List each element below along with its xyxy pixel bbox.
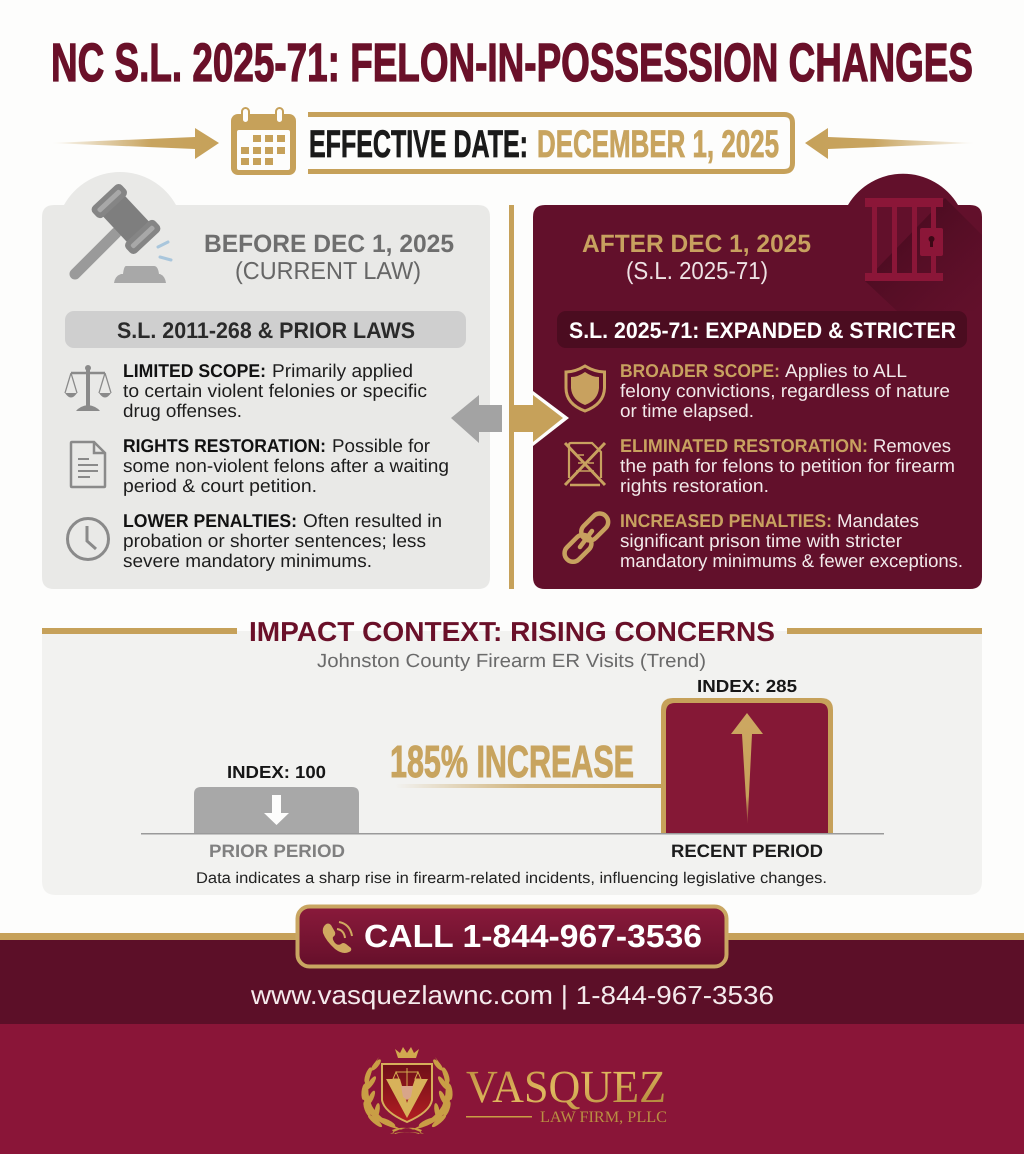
broader scope text: felony convictions, regardless of nature bbox=[620, 380, 950, 401]
impact rule left bbox=[42, 628, 237, 634]
after subheading: (S.L. 2025-71) bbox=[626, 258, 768, 285]
rights restoration text bbox=[123, 435, 449, 496]
eliminated restoration text: ELIMINATED RESTORATION: bbox=[620, 435, 868, 456]
rights restoration text: RIGHTS RESTORATION: bbox=[123, 435, 326, 456]
arrow: grey pointing left bbox=[451, 395, 502, 443]
after heading: AFTER DEC 1, 2025 bbox=[582, 230, 811, 258]
limited scope text: to certain violent felonies or specific bbox=[123, 380, 427, 401]
rights restoration text: Possible for bbox=[332, 435, 430, 456]
lower penalties text: severe mandatory minimums. bbox=[123, 550, 372, 571]
broader scope text: BROADER SCOPE: bbox=[620, 360, 780, 381]
before law pill bbox=[65, 311, 466, 348]
panel background bbox=[42, 172, 490, 589]
date box outline bbox=[308, 114, 792, 172]
limited scope text: LIMITED SCOPE: bbox=[123, 360, 266, 381]
call button: CALL 1-844-967-3536 bbox=[364, 918, 702, 954]
effective date banner bbox=[50, 108, 976, 175]
bar: recent period bbox=[661, 676, 833, 834]
eliminated restoration text: Removes bbox=[873, 435, 951, 456]
icon: gavel bbox=[75, 182, 171, 283]
shield bbox=[382, 1064, 432, 1122]
after law pill bbox=[557, 311, 967, 348]
increased penalties text: significant prison time with stricter bbox=[620, 530, 902, 551]
arrow: gold pointing right bbox=[510, 391, 569, 446]
logo rule bbox=[466, 1116, 532, 1118]
logo crest bbox=[361, 1047, 453, 1134]
arrow: left pointing in bbox=[50, 128, 219, 159]
rights restoration text: period & court petition. bbox=[123, 475, 317, 496]
limited scope text: drug offenses. bbox=[123, 400, 242, 421]
shield V bbox=[386, 1079, 428, 1118]
eliminated restoration text: rights restoration. bbox=[620, 475, 769, 496]
shield scales bbox=[393, 1068, 421, 1100]
call button bbox=[297, 906, 728, 969]
logo subtitle: LAW FIRM, PLLC bbox=[540, 1109, 667, 1126]
center divider bbox=[509, 205, 514, 589]
footer gold rule bbox=[0, 933, 1024, 940]
panel: impact context bbox=[42, 616, 982, 895]
increased penalties text bbox=[620, 510, 963, 571]
footer logo band bbox=[0, 1024, 1024, 1154]
icon: phone bbox=[323, 922, 352, 953]
icon: jail bars bbox=[865, 198, 943, 281]
broader scope text: or time elapsed. bbox=[620, 400, 754, 421]
bar chart bbox=[141, 676, 884, 861]
logo bbox=[361, 1047, 667, 1134]
effective date label: EFFECTIVE DATE: bbox=[309, 123, 528, 166]
bar: prior period: INDEX: 100 bbox=[227, 762, 326, 782]
before law pill: S.L. 2011-268 & PRIOR LAWS bbox=[117, 318, 415, 343]
impact subheading: Johnston County Firearm ER Visits (Trend) bbox=[317, 651, 706, 672]
label: recent period: RECENT PERIOD bbox=[671, 841, 823, 861]
impact background bbox=[42, 631, 982, 895]
after law pill: S.L. 2025-71: EXPANDED & STRICTER bbox=[569, 318, 956, 343]
website and phone line: www.vasquezlawnc.com | 1-844-967-3536 bbox=[250, 980, 774, 1010]
eliminated restoration text bbox=[620, 435, 955, 496]
increased penalties text: mandatory minimums & fewer exceptions. bbox=[620, 550, 963, 571]
panel: after bbox=[510, 174, 982, 589]
jail icon long shadow bbox=[865, 198, 982, 311]
icon: chain link bbox=[561, 510, 612, 565]
lower penalties text bbox=[123, 510, 442, 571]
arrow: right pointing in bbox=[805, 128, 976, 159]
effective date value: DECEMBER 1, 2025 bbox=[537, 123, 779, 166]
icon: document bbox=[71, 442, 105, 487]
label: prior period: PRIOR PERIOD bbox=[209, 841, 345, 861]
before heading: BEFORE DEC 1, 2025 bbox=[204, 230, 454, 258]
impact rule right bbox=[787, 628, 982, 634]
lower penalties text: Often resulted in bbox=[303, 510, 442, 531]
panel background bbox=[533, 174, 982, 589]
before subheading: (CURRENT LAW) bbox=[235, 258, 421, 285]
increase callout: 185% INCREASE bbox=[390, 736, 634, 787]
increased penalties text: INCREASED PENALTIES: bbox=[620, 510, 832, 531]
panel: before bbox=[42, 172, 490, 589]
chart axis bbox=[141, 833, 884, 834]
icon: calendar bbox=[231, 108, 296, 175]
icon: shield bbox=[566, 366, 604, 411]
logo wordmark: VASQUEZ bbox=[466, 1061, 666, 1112]
bar: prior period bbox=[194, 762, 359, 833]
rights restoration text: some non-violent felons after a waiting bbox=[123, 455, 449, 476]
icon: clock bbox=[68, 518, 108, 560]
bar: recent period: INDEX: 285 bbox=[697, 676, 797, 696]
lower penalties text: LOWER PENALTIES: bbox=[123, 510, 297, 531]
footer contact band bbox=[0, 940, 1024, 1024]
limited scope text: Primarily applied bbox=[272, 360, 413, 381]
right laurel bbox=[411, 1057, 453, 1130]
lower penalties text: probation or shorter sentences; less bbox=[123, 530, 426, 551]
limited scope text bbox=[123, 360, 427, 421]
crown bbox=[395, 1047, 419, 1058]
impact heading: IMPACT CONTEXT: RISING CONCERNS bbox=[249, 616, 775, 647]
broader scope text bbox=[620, 360, 950, 421]
wreath ribbon bbox=[390, 1128, 424, 1134]
eliminated restoration text: the path for felons to petition for firearm bbox=[620, 455, 955, 476]
footer bbox=[0, 906, 1024, 1154]
broader scope text: Applies to ALL bbox=[785, 360, 907, 381]
increased penalties text: Mandates bbox=[837, 510, 919, 531]
impact note: Data indicates a sharp rise in firearm-related incidents, influencing legislative changes. bbox=[196, 870, 827, 887]
icon: scales bbox=[65, 366, 111, 411]
left laurel bbox=[361, 1057, 403, 1130]
icon: crossed out document bbox=[565, 443, 605, 485]
